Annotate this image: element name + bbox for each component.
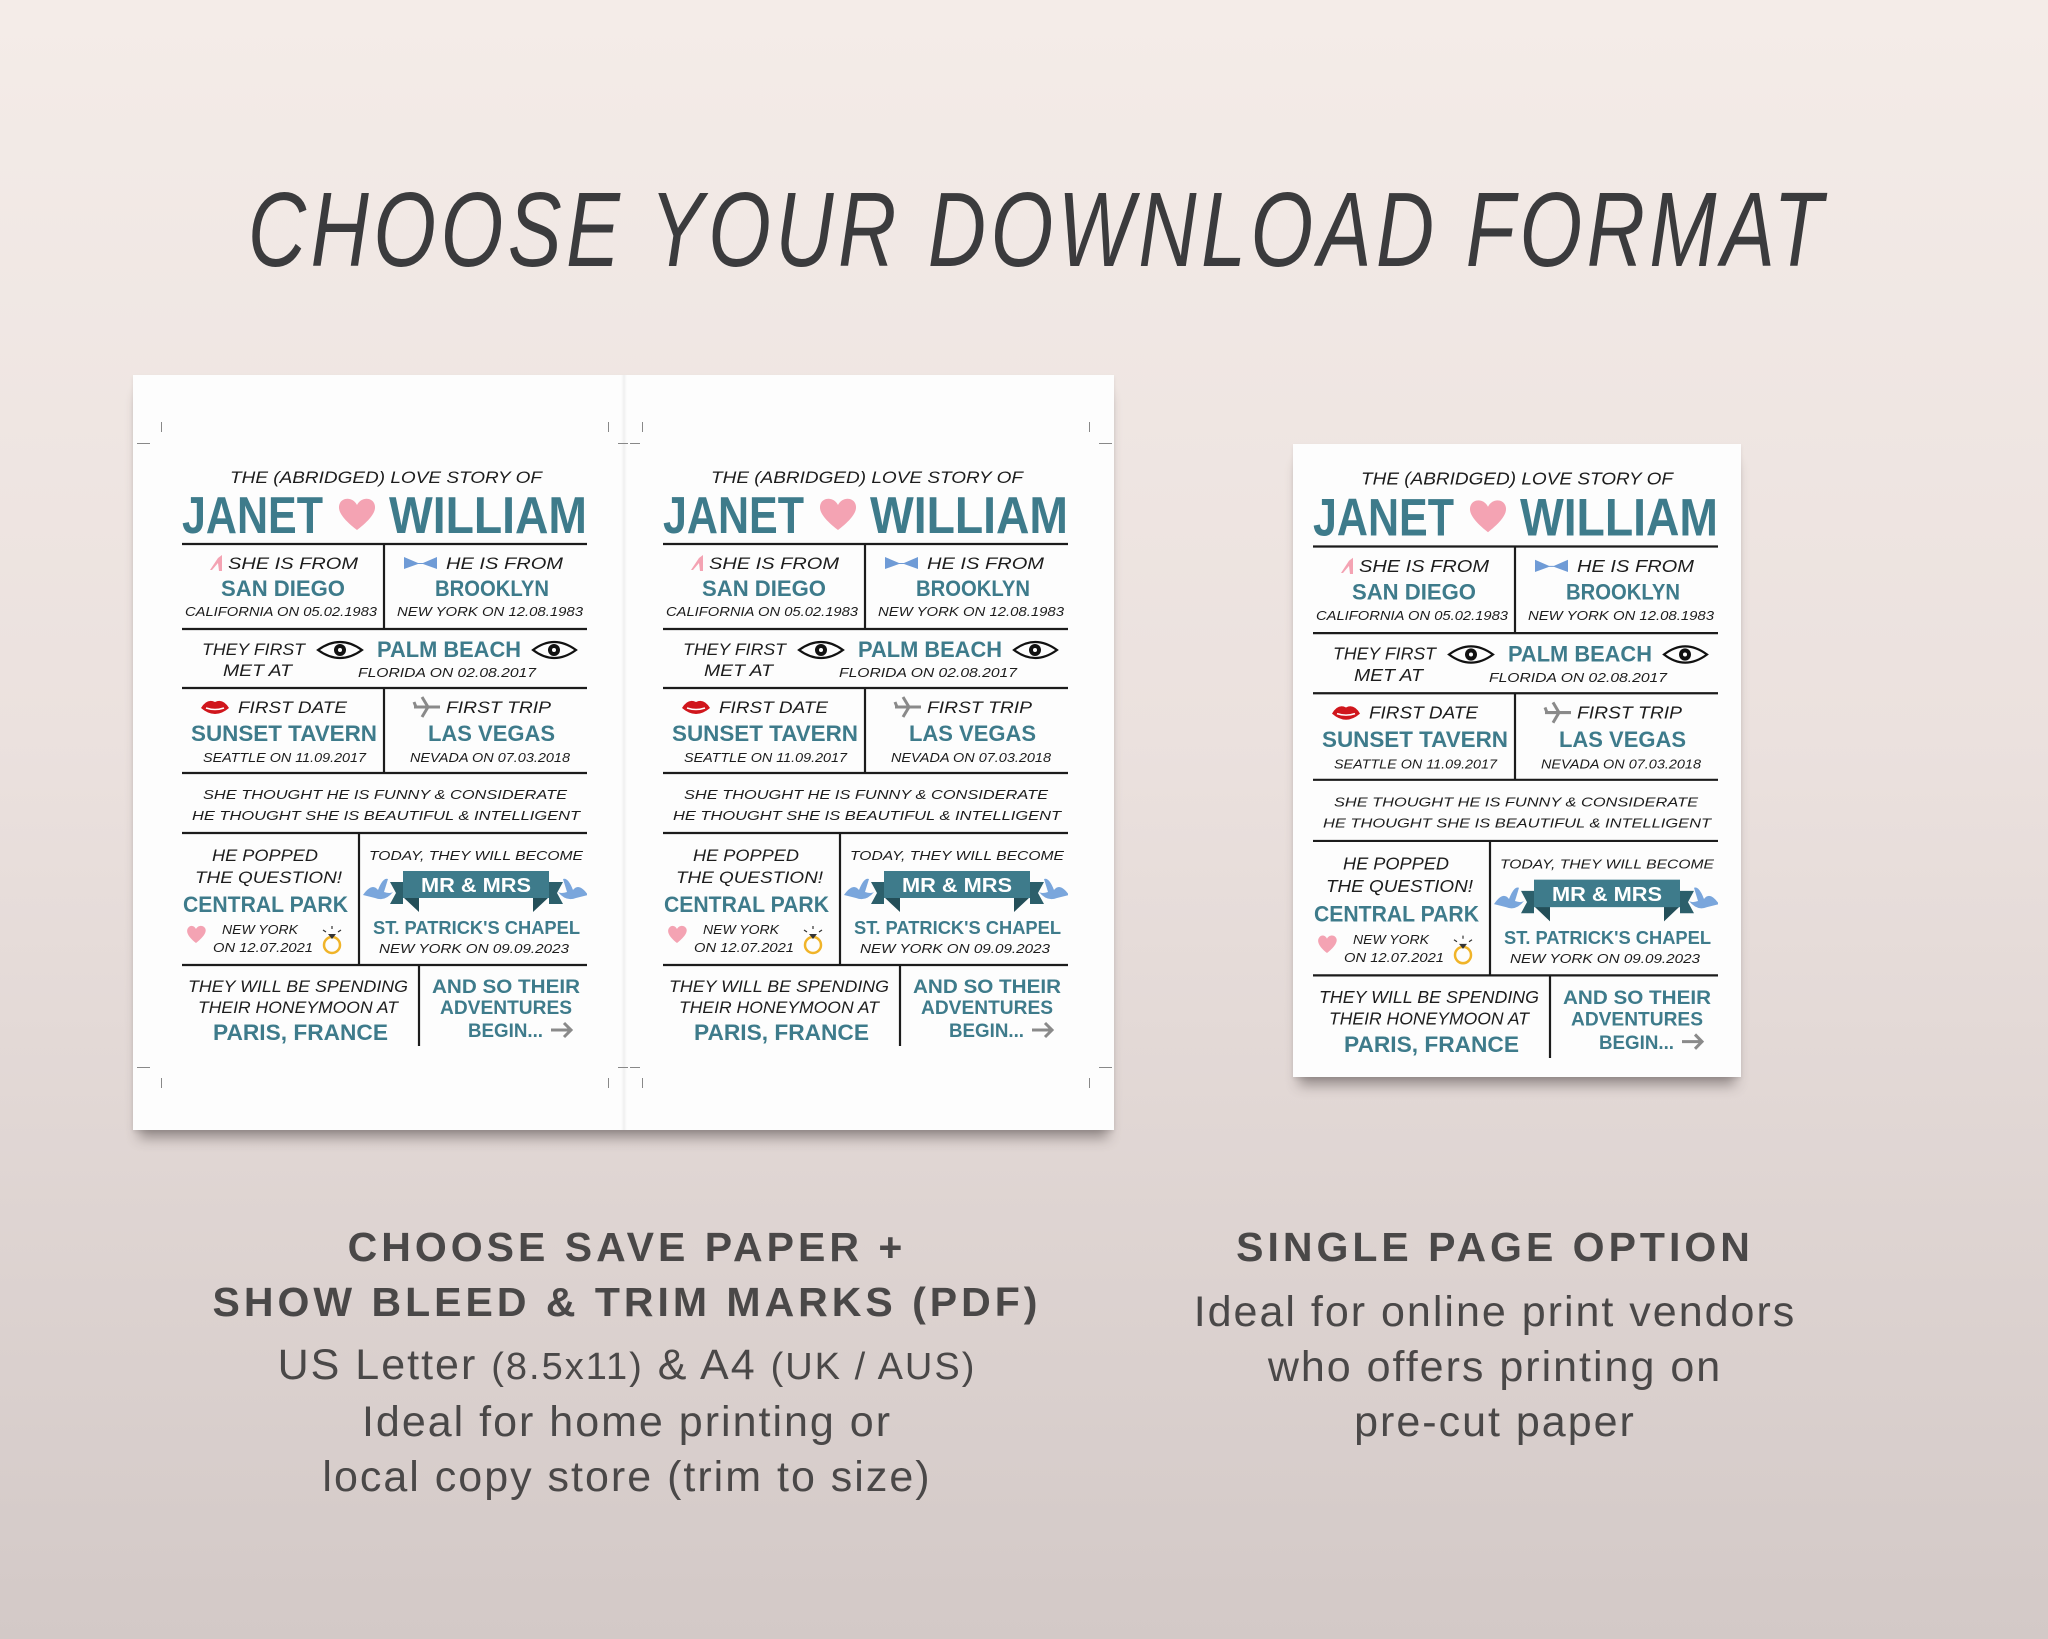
card: left page B: HE POPPED bbox=[693, 846, 799, 865]
card: left page A: MET AT bbox=[223, 661, 294, 680]
card: left page B: THE (ABRIDGED) LOVE STORY OF bbox=[711, 468, 1025, 487]
caption: single page option bbox=[1194, 1224, 1796, 1446]
card: left page B: MR & MRS bbox=[902, 875, 1012, 897]
card: single page C: BROOKLYN bbox=[1566, 579, 1680, 605]
card: single page C: NEVADA ON 07.03.2018 bbox=[1541, 756, 1702, 772]
card: left page B: MET AT bbox=[704, 661, 775, 680]
card: left page B: LAS VEGAS bbox=[909, 721, 1036, 746]
card: left page A: LAS VEGAS bbox=[428, 721, 555, 746]
panel: single page sheet bbox=[1293, 444, 1741, 1077]
card: left page B: BROOKLYN bbox=[916, 576, 1030, 601]
card: left page B: NEW YORK ON 12.08.1983 bbox=[878, 604, 1065, 619]
card: left page A: SAN DIEGO bbox=[221, 576, 345, 601]
card: left page A: HE POPPED bbox=[212, 846, 318, 865]
card: left page B: THEY WILL BE SPENDING bbox=[669, 977, 889, 996]
card: single page C: THE (ABRIDGED) LOVE STORY OF bbox=[1361, 468, 1675, 488]
card: left page A: HE THOUGHT SHE IS BEAUTIFUL & INTELLIGENT bbox=[192, 808, 581, 823]
card: single page C: MR & MRS bbox=[1552, 884, 1662, 906]
card: single page C: THEY WILL BE SPENDING bbox=[1319, 987, 1539, 1007]
card: left page A: HE IS FROM bbox=[446, 554, 564, 573]
card: left page A bbox=[182, 468, 587, 1046]
card: left page B: NEVADA ON 07.03.2018 bbox=[891, 750, 1052, 765]
caption: save paper option bbox=[213, 1224, 1041, 1501]
card: single page C: THEY FIRST bbox=[1333, 643, 1438, 664]
card: left page B: HE IS FROM bbox=[927, 554, 1045, 573]
card: left page B: SHE IS FROM bbox=[709, 554, 840, 573]
card: left page A: SEATTLE ON 11.09.2017 bbox=[203, 750, 367, 765]
card: left page A: AND SO THEIR bbox=[432, 977, 580, 998]
card: single page C bbox=[1313, 468, 1718, 1058]
card: single page C: TODAY, THEY WILL BECOME bbox=[1500, 856, 1714, 871]
card: single page C: HE IS FROM bbox=[1577, 556, 1695, 576]
card: left page B: THEIR HONEYMOON AT bbox=[679, 998, 881, 1017]
card: single page C: JANET bbox=[1313, 488, 1454, 547]
card: left page B: THE QUESTION! bbox=[676, 868, 823, 887]
card: left page B: SUNSET TAVERN bbox=[672, 721, 858, 746]
card: single page C: CALIFORNIA ON 05.02.1983 bbox=[1316, 608, 1509, 623]
card: left page A: THE QUESTION! bbox=[195, 868, 342, 887]
caption: save paper option: US Letter (8.5x11) & A4 (UK / AUS) bbox=[278, 1341, 976, 1389]
card: left page B bbox=[663, 468, 1068, 1046]
card: left page B: TODAY, THEY WILL BECOME bbox=[850, 848, 1064, 863]
card: single page C: AND SO THEIR bbox=[1563, 988, 1711, 1009]
card: single page C: HE THOUGHT SHE IS BEAUTIFUL & INTELLIGENT bbox=[1323, 816, 1712, 831]
card: single page C: LAS VEGAS bbox=[1559, 727, 1686, 752]
card: single page C: PALM BEACH bbox=[1508, 641, 1652, 667]
card: single page C: HE POPPED bbox=[1343, 853, 1449, 874]
card: left page A: MR & MRS bbox=[421, 875, 531, 897]
card: single page C: MET AT bbox=[1354, 665, 1425, 685]
card: left page B: FIRST DATE bbox=[719, 698, 829, 717]
card: left page A: CALIFORNIA ON 05.02.1983 bbox=[185, 604, 378, 619]
card: left page B: SHE THOUGHT HE IS FUNNY & CONSIDERATE bbox=[684, 787, 1048, 802]
card: left page A: SUNSET TAVERN bbox=[191, 721, 377, 746]
card: left page A: THE (ABRIDGED) LOVE STORY OF bbox=[230, 468, 544, 487]
card: left page A: NEW YORK ON 12.08.1983 bbox=[397, 604, 584, 619]
card: left page A: JANET bbox=[182, 487, 323, 545]
caption: single page option: who offers printing on bbox=[1268, 1343, 1722, 1391]
card: single page C: ADVENTURES bbox=[1571, 1009, 1703, 1030]
card: left page A: BROOKLYN bbox=[435, 576, 549, 601]
card: single page C: SUNSET TAVERN bbox=[1322, 727, 1508, 752]
card: left page A: TODAY, THEY WILL BECOME bbox=[369, 848, 583, 863]
card: left page B: NEW YORK bbox=[703, 922, 780, 937]
card: left page A: ADVENTURES bbox=[440, 998, 572, 1019]
card: left page B: FLORIDA ON 02.08.2017 bbox=[839, 665, 1018, 680]
card: left page B: ST. PATRICK'S CHAPEL bbox=[854, 918, 1061, 938]
card: single page C: ST. PATRICK'S CHAPEL bbox=[1504, 928, 1711, 948]
card: left page B: NEW YORK ON 09.09.2023 bbox=[860, 941, 1051, 956]
card: left page A: NEW YORK bbox=[222, 922, 299, 937]
card: single page C: FIRST TRIP bbox=[1577, 703, 1683, 723]
card: single page C: THEIR HONEYMOON AT bbox=[1329, 1008, 1531, 1028]
card: left page B: AND SO THEIR bbox=[913, 977, 1061, 998]
card: single page C: PARIS, FRANCE bbox=[1344, 1032, 1519, 1057]
card: single page C: BEGIN... bbox=[1599, 1033, 1674, 1054]
caption: save paper option: SHOW BLEED & TRIM MARKS (PDF) bbox=[213, 1279, 1041, 1325]
card: left page A: FIRST DATE bbox=[238, 698, 348, 717]
card: single page C: SHE IS FROM bbox=[1359, 556, 1490, 576]
card: left page A: THEIR HONEYMOON AT bbox=[198, 998, 400, 1017]
card: left page B: SAN DIEGO bbox=[702, 576, 826, 601]
card: single page C: NEW YORK bbox=[1353, 932, 1430, 947]
card: single page C: ON 12.07.2021 bbox=[1344, 950, 1444, 965]
card: left page B: HE THOUGHT SHE IS BEAUTIFUL & INTELLIGENT bbox=[673, 808, 1062, 823]
card: single page C: NEW YORK ON 09.09.2023 bbox=[1510, 951, 1701, 966]
card: left page B: PARIS, FRANCE bbox=[694, 1020, 869, 1045]
caption: single page option: Ideal for online print vendors bbox=[1194, 1288, 1796, 1336]
card: left page B: PALM BEACH bbox=[858, 637, 1002, 662]
card: left page A: PALM BEACH bbox=[377, 637, 521, 662]
card: left page A: SHE IS FROM bbox=[228, 554, 359, 573]
caption: single page option: SINGLE PAGE OPTION bbox=[1236, 1224, 1754, 1270]
card: left page A: PARIS, FRANCE bbox=[213, 1020, 388, 1045]
card: left page B: THEY FIRST bbox=[683, 640, 788, 659]
card: single page C: SAN DIEGO bbox=[1352, 579, 1476, 605]
caption: save paper option: local copy store (trim to size) bbox=[322, 1453, 932, 1501]
card: left page A: NEVADA ON 07.03.2018 bbox=[410, 750, 571, 765]
card: left page A: BEGIN... bbox=[468, 1021, 543, 1042]
card: left page A: NEW YORK ON 09.09.2023 bbox=[379, 941, 570, 956]
card: left page B: FIRST TRIP bbox=[927, 698, 1033, 717]
card: left page B: ON 12.07.2021 bbox=[694, 940, 794, 955]
card: left page A: ST. PATRICK'S CHAPEL bbox=[373, 918, 580, 938]
card: single page C: THE QUESTION! bbox=[1326, 876, 1473, 896]
title: CHOOSE YOUR DOWNLOAD FORMAT bbox=[248, 171, 1827, 289]
card: left page B: BEGIN... bbox=[949, 1021, 1024, 1042]
card: single page C: CENTRAL PARK bbox=[1314, 901, 1479, 926]
card: left page A: CENTRAL PARK bbox=[183, 892, 348, 917]
card: left page B: CENTRAL PARK bbox=[664, 892, 829, 917]
caption: save paper option: Ideal for home printing or bbox=[362, 1398, 892, 1446]
caption: single page option: pre-cut paper bbox=[1354, 1398, 1636, 1446]
caption: save paper option: CHOOSE SAVE PAPER + bbox=[348, 1224, 906, 1270]
card: left page B: JANET bbox=[663, 487, 804, 545]
card: left page A: THEY FIRST bbox=[202, 640, 307, 659]
card: left page A: ON 12.07.2021 bbox=[213, 940, 313, 955]
panel: save paper sheet bbox=[133, 375, 1114, 1130]
card: left page A: FIRST TRIP bbox=[446, 698, 552, 717]
card: left page A: THEY WILL BE SPENDING bbox=[188, 977, 408, 996]
card: single page C: SHE THOUGHT HE IS FUNNY & CONSIDERATE bbox=[1334, 794, 1698, 809]
card: left page A: FLORIDA ON 02.08.2017 bbox=[358, 665, 537, 680]
card: left page B: CALIFORNIA ON 05.02.1983 bbox=[666, 604, 859, 619]
card: left page B: ADVENTURES bbox=[921, 998, 1053, 1019]
card: single page C: FIRST DATE bbox=[1369, 703, 1479, 723]
card: single page C: FLORIDA ON 02.08.2017 bbox=[1489, 670, 1668, 685]
card: single page C: NEW YORK ON 12.08.1983 bbox=[1528, 608, 1715, 623]
card: left page B: SEATTLE ON 11.09.2017 bbox=[684, 750, 848, 765]
card: left page A: SHE THOUGHT HE IS FUNNY & CONSIDERATE bbox=[203, 787, 567, 802]
card: single page C: SEATTLE ON 11.09.2017 bbox=[1334, 756, 1498, 772]
